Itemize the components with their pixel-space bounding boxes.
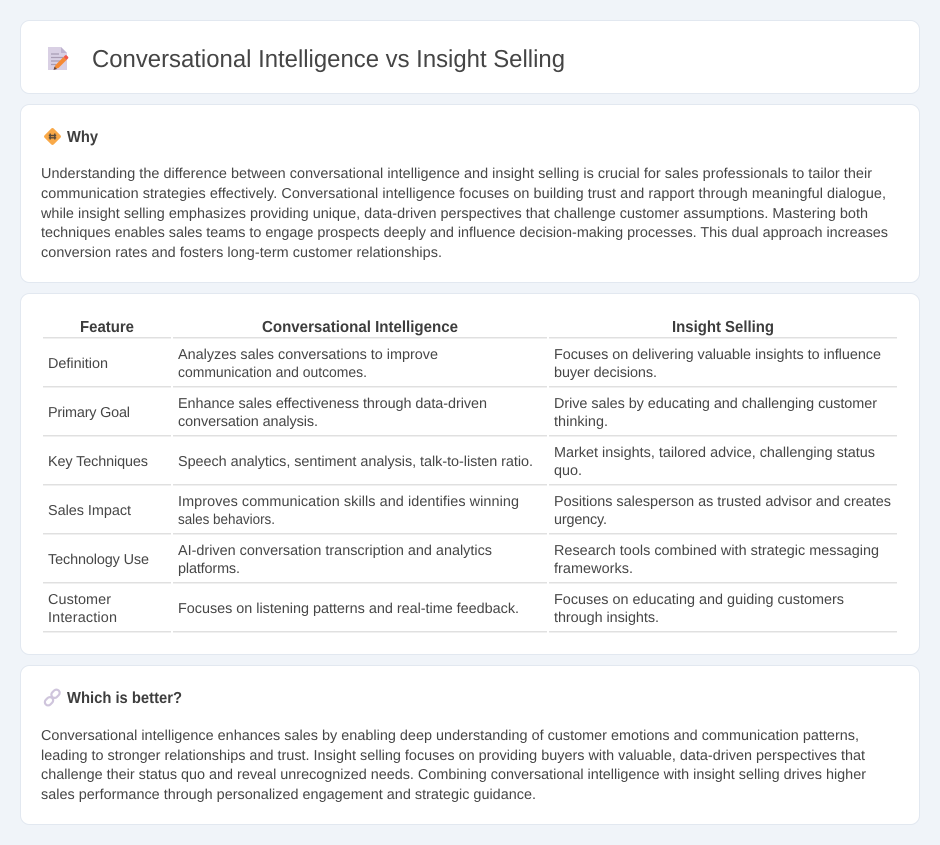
row: technology use [43, 543, 897, 584]
row: definition: buyer decisions. [554, 365, 657, 381]
row: sales impact: Positions salesperson as trusted advisor and creates [554, 494, 891, 510]
row: sales impact: sales behaviors. [178, 512, 275, 528]
row: sales impact: Improves communication skills and identifies winning [178, 494, 519, 510]
row: definition: Definition [48, 356, 108, 372]
row: customer interaction: through insights. [554, 610, 659, 626]
panel: comparison table [20, 294, 920, 654]
row: customer interaction: Interaction [48, 610, 117, 626]
row: technology use: Technology Use [48, 552, 149, 568]
title: Conversational Intelligence vs Insight Selling [92, 46, 565, 73]
panel: title header [20, 20, 920, 94]
text block: why body: Understanding the difference between conversational intelligence and insight selling is crucial for sales professionals to tailor their [41, 166, 872, 182]
text block: which is better body [41, 728, 866, 803]
row: primary goal: thinking. [554, 414, 608, 430]
text block: which is better body: sales performance through personalized engagement and strategic guidance. [41, 787, 536, 803]
heading: why: Why [67, 129, 98, 146]
row: definition: communication and outcomes. [178, 365, 367, 381]
row: definition: Focuses on delivering valuable insights to influence [554, 347, 881, 363]
row: key techniques [43, 445, 897, 486]
row: technology use: Research tools combined with strategic messaging [554, 543, 879, 559]
text block: why body [40, 166, 888, 261]
text block: why body: techniques enables sales teams to engage prospects deeply and influence decision-making processes. This dual approach increases [41, 225, 888, 241]
text block: which is better body: leading to stronger relationships and trust. Insight selling focuses on providing buyers with valuable, data-driven perspectives that [41, 748, 865, 764]
icon: warning diamond [43, 127, 62, 146]
table header row: Insight Selling [672, 319, 774, 336]
row: technology use: platforms. [178, 561, 240, 577]
row: definition: Analyzes sales conversations to improve [178, 347, 438, 363]
text block: why body: communication strategies effectively. Conversational intelligence focuses on building trust and rapport through meaningful dialogue, [41, 186, 886, 202]
row: definition [43, 347, 897, 388]
text block: which is better body: Conversational intelligence enhances sales by enabling deep understanding of customer emotions and communication patterns, [41, 728, 859, 744]
row: technology use: AI-driven conversation transcription and analytics [178, 543, 492, 559]
text block: why body: conversion rates and fosters long-term customer relationships. [41, 245, 442, 261]
row: primary goal: Drive sales by educating and challenging customer [554, 396, 877, 412]
row: technology use: frameworks. [554, 561, 633, 577]
row: customer interaction: Focuses on listening patterns and real-time feedback. [178, 601, 519, 617]
row: sales impact [43, 494, 897, 534]
row: customer interaction [43, 592, 897, 632]
row: key techniques: Key Techniques [48, 454, 148, 470]
table header row: Conversational Intelligence [262, 319, 458, 336]
row: primary goal [43, 396, 897, 436]
row: key techniques: Market insights, tailored advice, challenging status [554, 445, 875, 461]
icon: document with pencil [48, 47, 68, 70]
row: key techniques: Speech analytics, sentiment analysis, talk-to-listen ratio. [178, 454, 533, 470]
text block: which is better body: challenge their status quo and reveal unrecognized needs. Combining conversational intelligence with insight selling drives higher [41, 767, 866, 783]
row: key techniques: quo. [554, 463, 582, 479]
row: sales impact: Sales Impact [48, 503, 131, 519]
row: customer interaction: Focuses on educating and guiding customers [554, 592, 844, 608]
table header row [43, 319, 897, 338]
panel: why [20, 104, 920, 282]
row: primary goal: Primary Goal [48, 405, 130, 421]
icon: link [44, 688, 61, 707]
panel: which is better [20, 666, 920, 824]
row: customer interaction: Customer [48, 592, 111, 608]
row: primary goal: conversation analysis. [178, 414, 318, 430]
row: sales impact: urgency. [554, 512, 607, 528]
row: primary goal: Enhance sales effectiveness through data-driven [178, 396, 487, 412]
heading: which is better: Which is better? [67, 690, 182, 707]
text block: why body: while insight selling emphasizes providing unique, data-driven perspectives that challenge customer assumptions. Mastering both [40, 206, 868, 222]
table header row: Feature [80, 319, 134, 336]
